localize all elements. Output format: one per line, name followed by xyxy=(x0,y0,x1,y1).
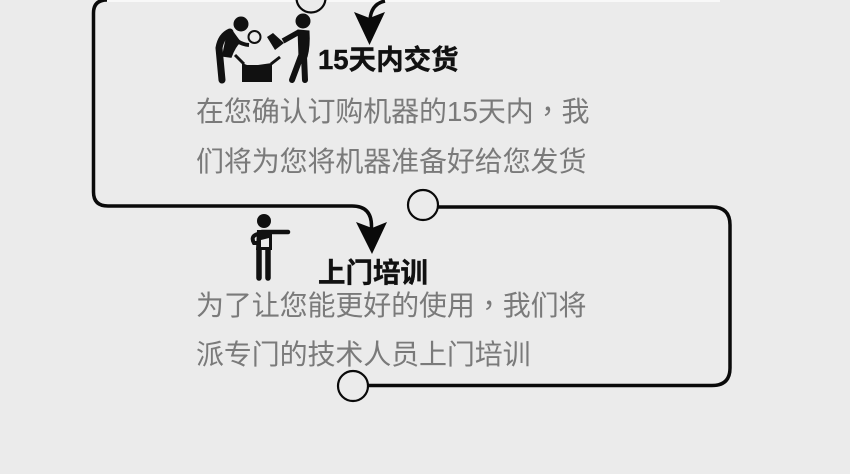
circle node: middle xyxy=(408,190,438,220)
text: delivery description line 1: 在您确认订购机器的15天内，我 xyxy=(196,90,589,130)
icon: two people inspecting a box xyxy=(219,14,310,82)
text: delivery description line 2: 们将为您将机器准备好给您发货 xyxy=(196,146,586,177)
icon: person pointing xyxy=(253,214,288,278)
arrow: middle xyxy=(356,222,387,254)
arrow: top xyxy=(354,12,385,45)
connector: left loop xyxy=(94,0,372,235)
heading: delivery: 15天内交货 xyxy=(318,44,459,75)
circle node: top xyxy=(296,0,326,12)
top white strip xyxy=(105,0,720,2)
connector: right loop xyxy=(368,207,730,386)
connector: top arrow tail xyxy=(370,1,385,20)
text: training description line 2: 派专门的技术人员上门培训 xyxy=(196,339,531,370)
heading: on-site training: 上门培训 xyxy=(318,257,428,288)
circle node: bottom xyxy=(338,371,368,401)
text: training description line 1: 为了让您能更好的使用，我们将 xyxy=(196,284,586,324)
